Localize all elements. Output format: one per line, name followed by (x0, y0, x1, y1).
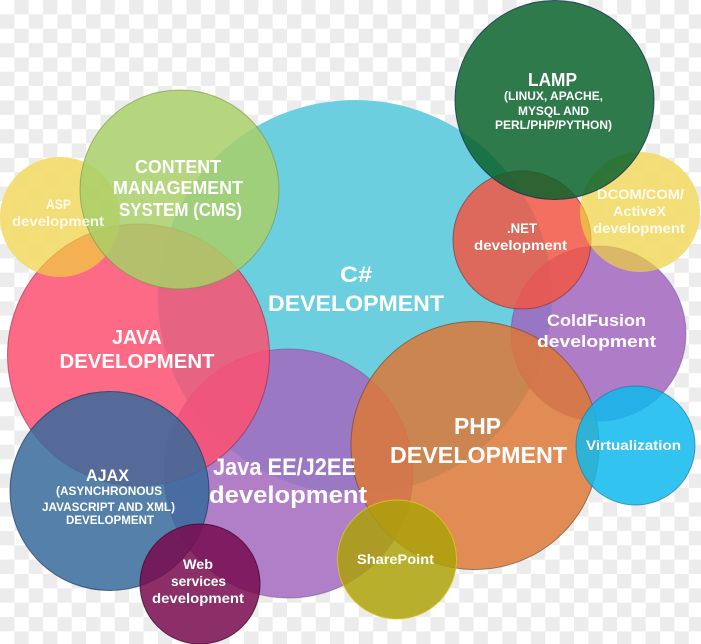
circle: ColdFusion (511, 246, 686, 421)
label: CMS: CONTENT (135, 157, 221, 177)
label: CMS: SYSTEM (CMS) (119, 200, 242, 220)
label: C# development: DEVELOPMENT (268, 291, 445, 316)
circle: LAMP (455, 0, 654, 200)
label: .NET development: development (474, 237, 567, 253)
label: Java development: DEVELOPMENT (60, 350, 215, 373)
label: C# development: C# (340, 262, 372, 287)
label: Java EE/J2EE development: development (209, 482, 367, 509)
label: ASP development (12, 196, 104, 229)
label: .NET development (474, 220, 567, 253)
label: ColdFusion development: development (537, 332, 656, 351)
circle: AJAX (10, 392, 209, 590)
label: PHP development: DEVELOPMENT (390, 442, 567, 468)
circle: DCOM/COM/ActiveX (580, 152, 700, 272)
label: AJAX: AJAX (86, 466, 130, 485)
label: CMS: MANAGEMENT (113, 178, 243, 198)
circle: CMS (80, 90, 279, 289)
circle: Web services (140, 524, 260, 644)
label: ASP development: ASP (46, 196, 71, 212)
label: Java EE/J2EE development (209, 454, 367, 509)
label: Web services development: services (171, 573, 226, 589)
circle: ASP (0, 157, 120, 277)
label: AJAX: (ASYNCHRONOUS (56, 484, 162, 498)
label: CMS (113, 157, 243, 220)
circle: SharePoint (338, 500, 456, 619)
label: LAMP: PERL/PHP/PYTHON) (495, 118, 612, 132)
label: Web services development: Web (183, 556, 213, 572)
label: SharePoint: SharePoint (357, 551, 434, 567)
circle: PHP (351, 322, 599, 570)
label: DCOM/COM/ActiveX development (593, 186, 685, 236)
label: ColdFusion development (537, 311, 656, 351)
label: Java development (60, 326, 215, 373)
label: LAMP: (LINUX, APACHE, (504, 89, 603, 103)
circle: Virtualization (576, 386, 695, 505)
label: Java development: JAVA (112, 326, 162, 349)
label: .NET development: .NET (507, 220, 537, 236)
label: LAMP: MYSQL AND (518, 104, 589, 118)
label: AJAX: DEVELOPMENT (66, 513, 155, 527)
label: AJAX (42, 466, 175, 527)
labels layer (12, 70, 685, 606)
label: DCOM/COM/ActiveX development: DCOM/COM/ (597, 186, 684, 202)
label: Web services development (152, 556, 244, 606)
label: Java EE/J2EE development: Java EE/J2EE (213, 454, 356, 481)
label: C# development (268, 262, 445, 316)
circle: Java EE/J2EE (164, 349, 413, 598)
circle: Java (8, 224, 270, 486)
label: PHP development (390, 413, 567, 468)
label: Web services development: development (152, 590, 244, 606)
circle: .NET (453, 171, 591, 309)
label: ASP development: development (12, 213, 104, 229)
label: DCOM/COM/ActiveX development: ActiveX (613, 203, 667, 219)
label: AJAX: JAVASCRIPT AND XML) (42, 500, 175, 514)
label: DCOM/COM/ActiveX development: development (593, 220, 685, 236)
label: LAMP (495, 70, 612, 132)
label: ColdFusion development: ColdFusion (547, 311, 646, 330)
label: PHP development: PHP (454, 413, 501, 439)
label: LAMP: LAMP (528, 70, 577, 90)
circle: C# (158, 100, 552, 494)
label: Virtualization: Virtualization (586, 437, 681, 453)
